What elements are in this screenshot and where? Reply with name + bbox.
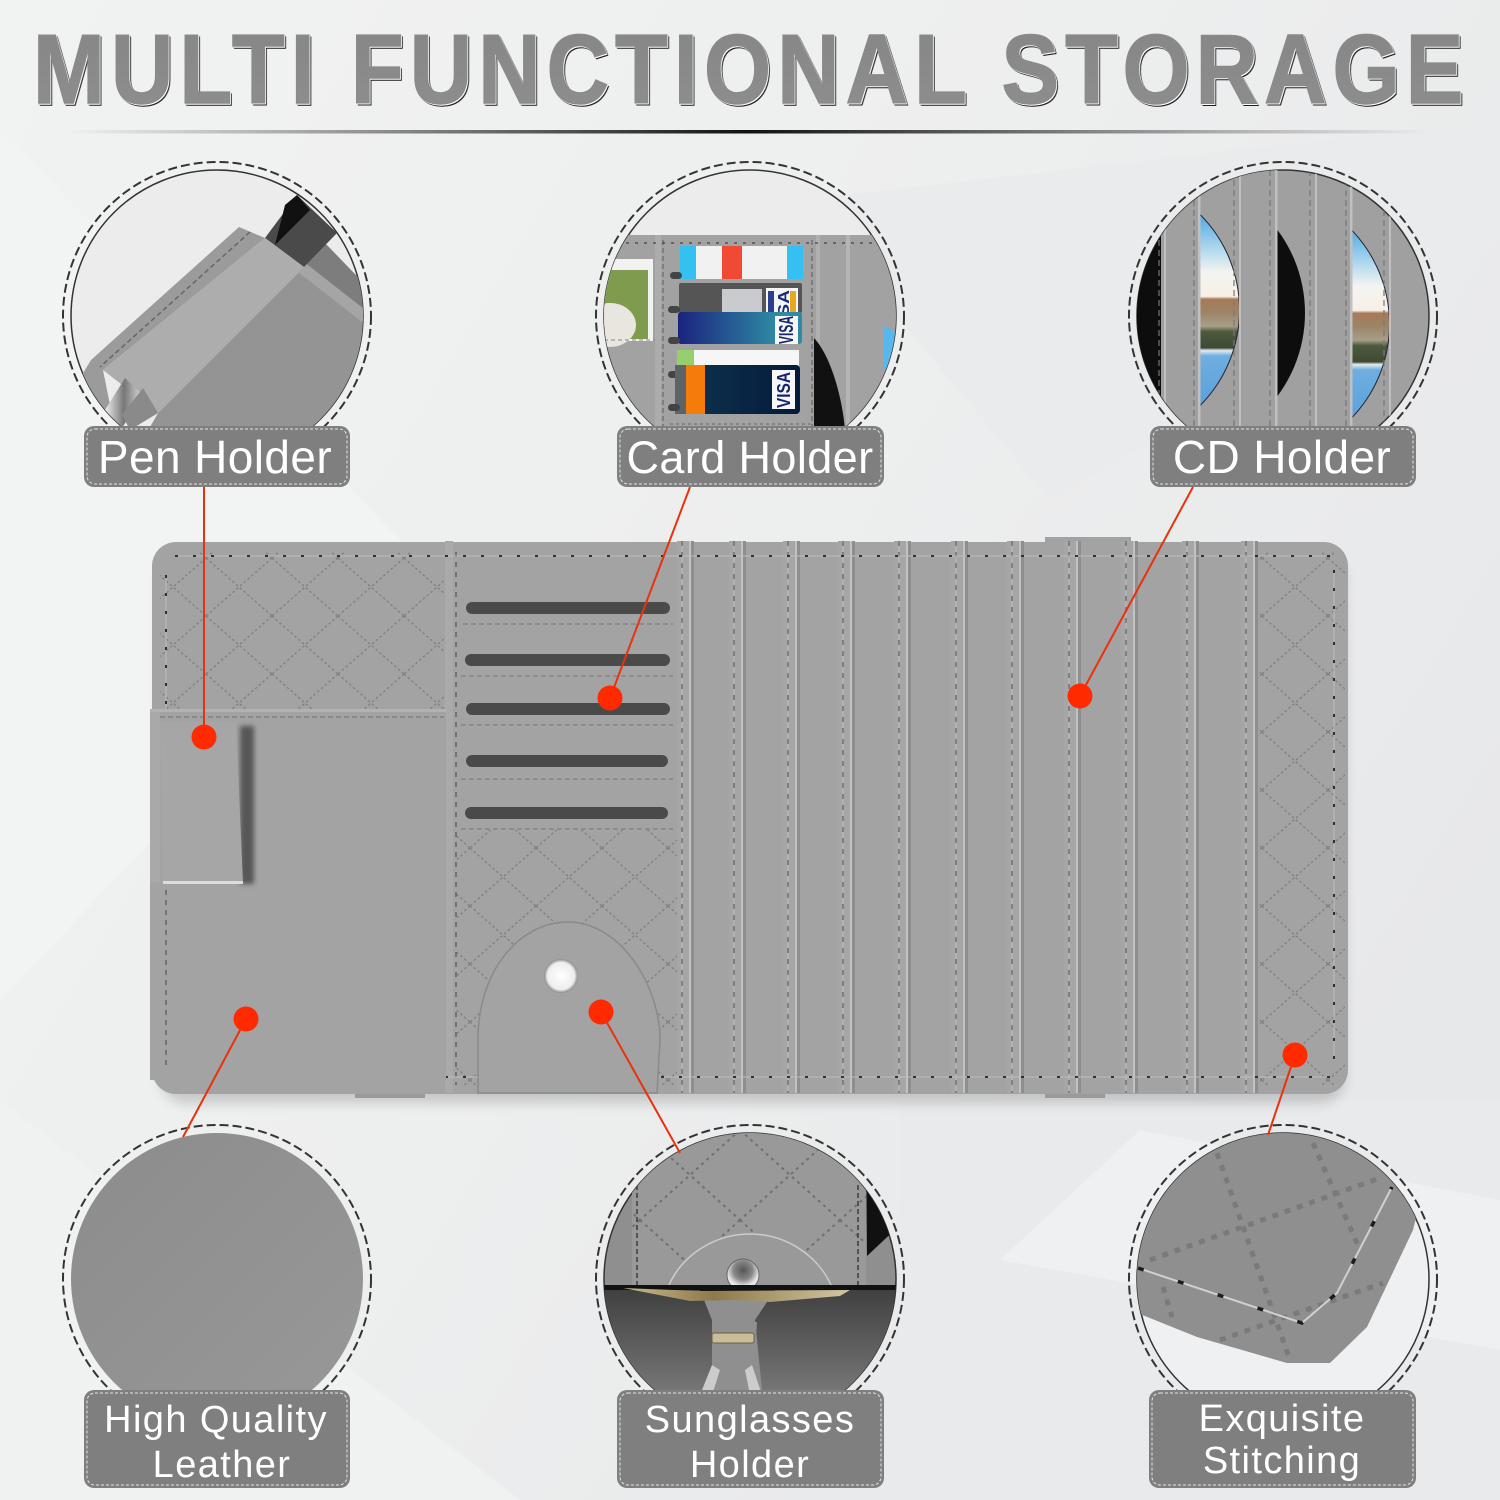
callout: stitching [1268, 1042, 1308, 1135]
pocket and pen loop [150, 709, 446, 1080]
label: exquisite stitching: Stitching [1203, 1440, 1361, 1482]
wallet organizer product photo [150, 537, 1348, 1103]
label: high quality leather [84, 1390, 350, 1488]
callout: pen holder [192, 487, 216, 750]
card: blue visa: VISA [776, 316, 798, 344]
label: high quality leather: Leather [153, 1444, 291, 1486]
card: night visa: VISA [774, 372, 794, 408]
circle: pen holder detail [62, 161, 372, 426]
card: blue visa [668, 312, 802, 344]
card: dark visa: VISA [776, 289, 793, 335]
callout: CD holder [1068, 487, 1193, 708]
callout: sunglasses [588, 1000, 680, 1153]
label: pen holder: Pen Holder [98, 431, 332, 483]
center card panel [445, 541, 673, 1093]
label: exquisite stitching: Exquisite [1199, 1398, 1365, 1440]
vertical CD slots [677, 541, 1258, 1093]
circle: high quality leather detail [63, 1125, 371, 1433]
card: green white [668, 350, 799, 378]
label: exquisite stitching [1149, 1390, 1416, 1488]
quilted panel: center lower [455, 830, 683, 1085]
circle: card holder detail [595, 161, 905, 426]
quilted panel: top left [160, 552, 448, 710]
title divider rule [65, 130, 1430, 134]
label: CD holder [1150, 426, 1416, 487]
card: dark visa [668, 283, 802, 313]
title: MULTI FUNCTIONAL STORAGE [33, 14, 1469, 124]
circle: exquisite stitching detail [1128, 1124, 1438, 1390]
circle: CD holder detail [1128, 161, 1438, 426]
callout: leather [183, 1006, 258, 1137]
circle: sunglasses holder detail [595, 1124, 905, 1390]
top and bottom stitching [166, 556, 1334, 1077]
label: sunglasses holder: Holder [690, 1444, 810, 1486]
label: CD holder: CD Holder [1173, 431, 1391, 483]
card: stripes [670, 246, 803, 279]
sunglasses flap with snap [478, 922, 660, 1093]
card: night visa [668, 365, 800, 414]
label: card holder: Card Holder [626, 432, 874, 483]
label: high quality leather: High Quality [104, 1399, 328, 1441]
label: sunglasses holder [617, 1390, 884, 1488]
label: sunglasses holder: Sunglasses [645, 1399, 855, 1441]
callout: card holder [598, 487, 690, 710]
quilted panel: right edge [1257, 552, 1345, 1086]
